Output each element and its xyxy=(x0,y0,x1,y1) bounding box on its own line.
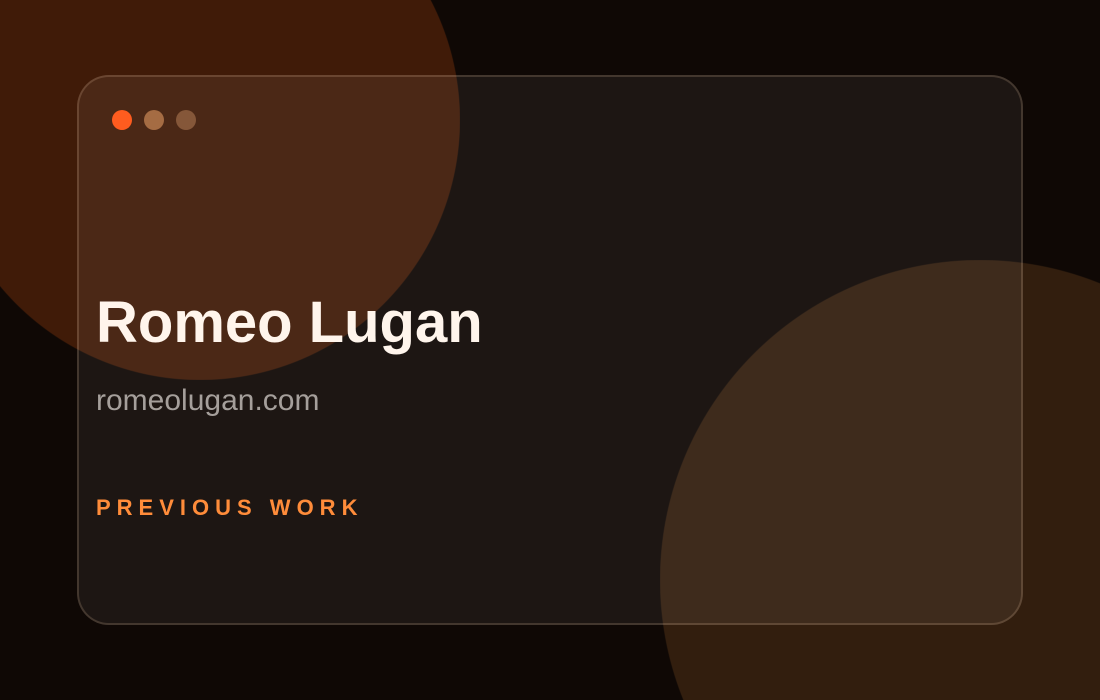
dot: tan xyxy=(144,110,164,130)
dot: muted tan xyxy=(176,110,196,130)
title: Romeo Lugan xyxy=(96,290,483,355)
window dots xyxy=(112,110,196,130)
dot: orange xyxy=(112,110,132,130)
background circle: bottom right xyxy=(660,260,1100,700)
background circle: top left xyxy=(0,0,460,380)
section label: PREVIOUS WORK xyxy=(96,495,363,520)
website url: romeolugan.com xyxy=(96,384,319,417)
panel: glass card xyxy=(77,75,1023,625)
